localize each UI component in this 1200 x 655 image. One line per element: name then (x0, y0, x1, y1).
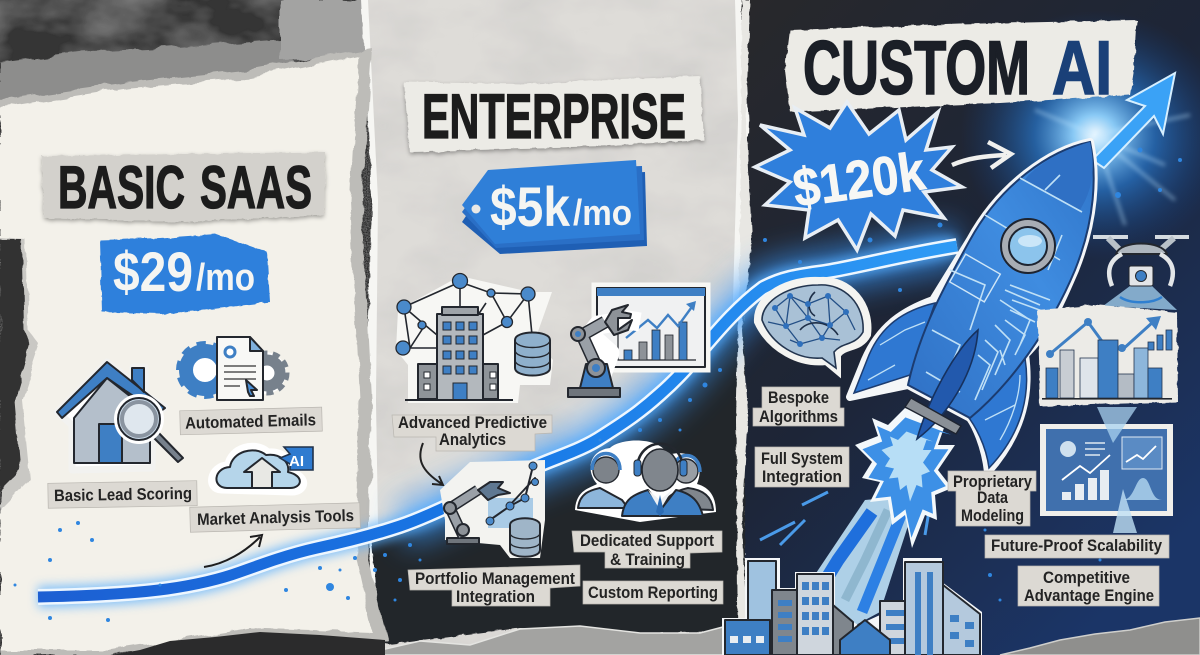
icon: portfolio robot and database (440, 460, 545, 558)
icon: drone (1093, 237, 1189, 310)
label: Advanced Predictive Analytics: Advanced Predictive (398, 414, 547, 432)
title: Basic SaaS: BASIC (58, 154, 185, 221)
rocket circuit lines (926, 175, 1082, 400)
price: $5k/mo stacked tag (462, 160, 647, 254)
label: Portfolio Management Integration: Portfolio Management (415, 570, 575, 588)
title: Custom AI: AI (1052, 26, 1112, 111)
rocket outer sticker border (850, 142, 1094, 472)
rocket schematic panel (950, 254, 1000, 302)
icon: robot arm and chart (568, 284, 709, 398)
label: Competitive Advantage Engine: Competitive (1043, 569, 1130, 587)
label: Portfolio Management Integration (408, 565, 580, 606)
label: Advanced Predictive Analytics (392, 414, 552, 451)
rocket center fin (917, 330, 978, 439)
label: Basic Lead Scoring (48, 481, 197, 508)
panel: top torn paper band (0, 0, 420, 110)
icon: projection beams (1097, 407, 1137, 533)
panel: basic SaaS cream paper (0, 48, 388, 655)
label: Portfolio Management Integration: Integration (456, 588, 535, 606)
label: Bespoke Algorithms: Bespoke (768, 389, 829, 407)
decoration: sparks (14, 148, 1182, 622)
label: Full System Integration (755, 447, 849, 487)
label: Advanced Predictive Analytics: Analytics (439, 431, 506, 449)
panel: white torn edge of custom AI section (736, 0, 752, 655)
title: Enterprise (404, 76, 704, 152)
label: Competitive Advantage Engine (1018, 566, 1159, 606)
panel: enterprise grey paper (362, 0, 748, 655)
arrow: hand-drawn to portfolio icon (420, 443, 443, 485)
label: Proprietary Data Modeling: Modeling (961, 507, 1024, 525)
rocket right fin (966, 358, 1027, 468)
label: Competitive Advantage Engine: Advantage Engine (1024, 587, 1154, 605)
rocket body (908, 142, 1094, 418)
icon: rocket exhaust trail (760, 472, 930, 655)
rocket left fin (854, 303, 935, 393)
arrow: hand-drawn to Market Analysis (204, 535, 262, 567)
rocket nozzle (905, 398, 961, 434)
icon: city skyline (722, 558, 982, 655)
title: Basic SaaS: SAAS (200, 154, 312, 221)
price: $29/mo: $29 (113, 240, 193, 303)
label: Custom Reporting: Custom Reporting (588, 584, 718, 602)
icon: rocket flame (855, 408, 958, 548)
label: Dedicated Support & Training: Dedicated Support (580, 532, 714, 550)
title: Basic SaaS (42, 152, 325, 222)
price: $5k/mo stacked tag: $5k (490, 175, 571, 238)
panel: enterprise lower dark section (372, 302, 745, 645)
icon: gears and document (179, 337, 287, 400)
glow: rocket flare (960, 10, 1200, 260)
label: Proprietary Data Modeling: Data (977, 489, 1009, 507)
panel: custom AI dark backdrop (745, 0, 1200, 655)
label: Proprietary Data Modeling: Proprietary (953, 473, 1033, 491)
label: Bespoke Algorithms (753, 387, 844, 426)
icon: support team with headsets (575, 441, 716, 522)
label: Market Analysis Tools: Market Analysis Tools (197, 507, 354, 529)
panel: bottom-right torn paper (1000, 618, 1200, 655)
label: Automated Emails: Automated Emails (185, 411, 316, 433)
label: Full System Integration: Integration (762, 468, 842, 486)
label: Proprietary Data Modeling (948, 471, 1036, 526)
chart: dashboard panel (1040, 424, 1173, 516)
label: Full System Integration: Full System (761, 450, 843, 468)
icon: enterprise building network (396, 274, 553, 403)
icon: arrow head of growth line (1092, 73, 1175, 168)
label: Basic Lead Scoring: Basic Lead Scoring (54, 485, 192, 505)
price: $29/mo (100, 234, 270, 314)
icon: house with magnifier (57, 362, 183, 470)
label: Future-Proof Scalability: Future-Proof Scalability (991, 537, 1163, 555)
title: Enterprise: ENTERPRISE (422, 82, 686, 152)
icon: AI cloud: AI (289, 453, 304, 470)
icon: neural brain (757, 280, 868, 372)
price: $5k/mo stacked tag: /mo (573, 192, 632, 233)
price: $120k starburst (755, 102, 962, 250)
title: Custom AI: CUSTOM (803, 26, 1030, 111)
rocket nose band (1025, 142, 1093, 210)
label: Dedicated Support & Training (572, 531, 722, 569)
icon: AI cloud (212, 446, 313, 492)
label: Dedicated Support & Training: & Training (610, 551, 685, 569)
arrow: price to rocket (952, 142, 1011, 168)
chart line: growth trajectory (38, 246, 957, 597)
rocket fin lines (868, 322, 1020, 440)
price: $29/mo: /mo (196, 257, 255, 299)
panel: bottom torn grey strip (372, 623, 738, 655)
icon: rocket (850, 142, 1094, 472)
price: $120k starburst: $120k (789, 141, 929, 219)
rocket window (1001, 219, 1055, 273)
chart: city skyline analytics panel (1037, 305, 1178, 406)
label: Bespoke Algorithms: Algorithms (759, 408, 838, 426)
